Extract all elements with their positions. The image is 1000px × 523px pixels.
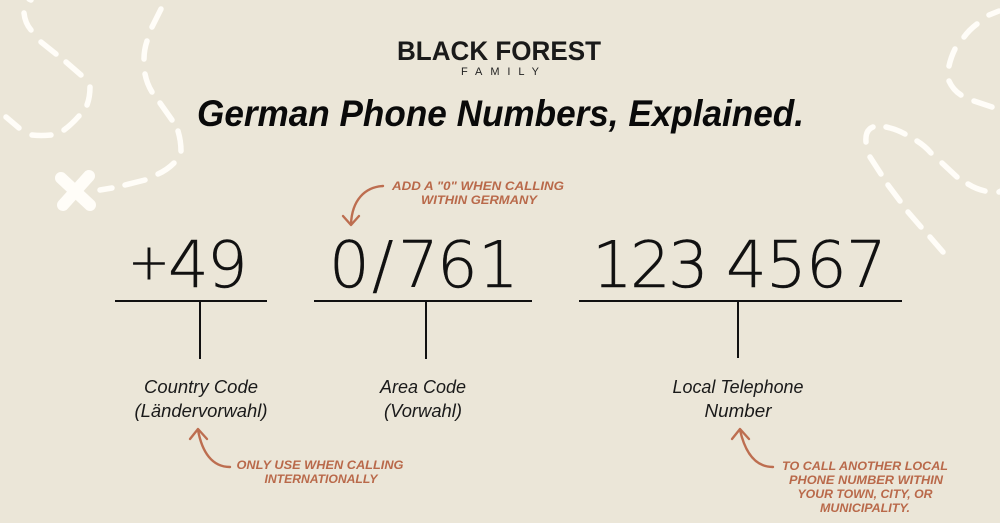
- icon: X marks the spot: [61, 176, 90, 205]
- logo: FAMILY: [461, 66, 540, 78]
- label: local telephone number: Local Telephone: [672, 377, 804, 397]
- note: add a zero: WITHIN GERMANY: [421, 195, 538, 207]
- decorative dashed trail leading to X: [100, 9, 181, 190]
- note: add a zero: ADD A "0" WHEN CALLING: [391, 181, 564, 193]
- note: local calls: [782, 461, 948, 515]
- bracket: area code: [314, 301, 532, 359]
- number: local number: 123 4567: [592, 229, 887, 303]
- label: area code: (Vorwahl): [384, 401, 462, 421]
- title: German Phone Numbers, Explained.: [197, 93, 804, 134]
- note: international use: [236, 460, 404, 486]
- arrow: to area code zero: [343, 186, 383, 225]
- note: add a zero: [391, 181, 564, 207]
- note: local calls: PHONE NUMBER WITHIN: [789, 475, 944, 487]
- label: local telephone number: Number: [704, 401, 773, 421]
- label: country code: (Ländervorwahl): [134, 401, 268, 421]
- label: country code: [134, 377, 268, 421]
- label: area code: [379, 377, 466, 421]
- note: international use: INTERNATIONALLY: [264, 474, 379, 486]
- logo: BLACK FOREST: [397, 36, 601, 66]
- note: local calls: YOUR TOWN, CITY, OR: [798, 489, 933, 501]
- label: area code: Area Code: [379, 377, 466, 397]
- arrow: to local number: [732, 429, 773, 467]
- decorative dashed trail: right: [866, 127, 1000, 252]
- label: country code: Country Code: [144, 377, 258, 397]
- number: country code: 49: [168, 229, 248, 303]
- decorative dashed trail: top left: [6, 0, 90, 136]
- bracket: local number: [579, 301, 902, 358]
- label: local telephone number: [672, 377, 804, 421]
- arrow: to country code: [190, 429, 230, 467]
- logo: [397, 36, 601, 78]
- number: area code: 0/761: [329, 229, 519, 303]
- decorative dashed trail: top right: [949, 11, 999, 107]
- note: local calls: TO CALL ANOTHER LOCAL: [782, 461, 948, 473]
- bracket: country code: [115, 301, 267, 359]
- note: local calls: MUNICIPALITY.: [820, 503, 910, 515]
- note: international use: ONLY USE WHEN CALLING: [236, 460, 404, 472]
- number: country code: +: [128, 233, 170, 291]
